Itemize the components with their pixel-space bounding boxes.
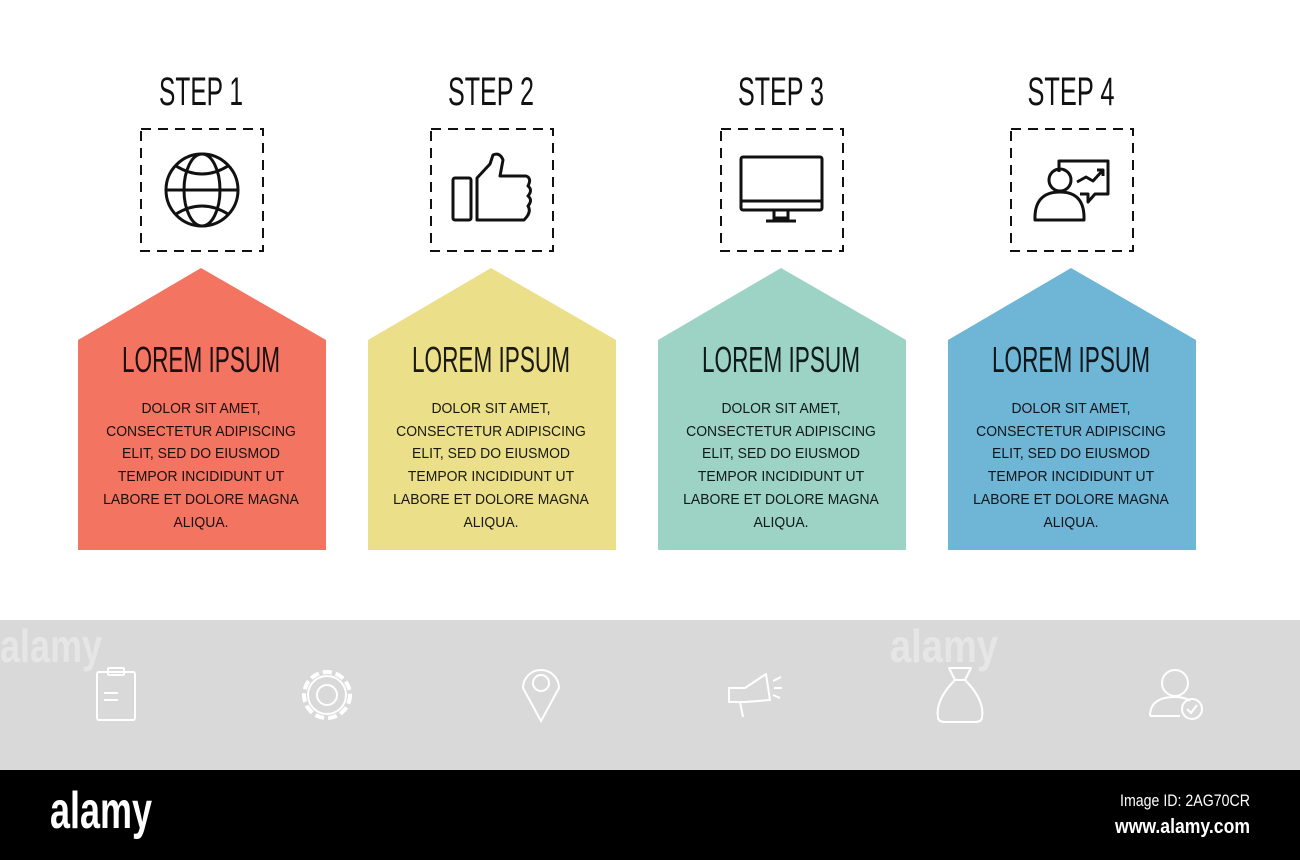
step 1 title: STEP 1 [159, 70, 243, 114]
panel: step 1 card: CONSECTETUR ADIPISCING [106, 424, 296, 440]
step 2 title: STEP 2 [448, 70, 534, 114]
panel: step 2 card [368, 268, 616, 550]
icon: clipboard [97, 668, 135, 720]
panel: step 3 card: LOREM IPSUM [702, 339, 860, 380]
panel: step 2 card: ALIQUA. [464, 515, 518, 531]
panel: step 1 card [78, 268, 326, 550]
step 3 title: STEP 3 [738, 70, 824, 114]
panel: step 4 card: ALIQUA. [1044, 515, 1098, 531]
panel: step 3 card: CONSECTETUR ADIPISCING [686, 424, 876, 440]
footer logo: alamy [50, 782, 152, 840]
panel: step 1 card: TEMPOR INCIDIDUNT UT [118, 469, 284, 485]
panel: step 2 card: LOREM IPSUM [412, 339, 570, 380]
panel: step 4 card: LOREM IPSUM [992, 339, 1150, 380]
panel: step 4 card [948, 268, 1196, 550]
panel: step 3 card: ELIT, SED DO EIUSMOD [702, 446, 860, 462]
panel: step 1 card: LABORE ET DOLORE MAGNA [103, 492, 299, 508]
panel: step 4 card: DOLOR SIT AMET, [1011, 401, 1131, 417]
footer: black band [0, 770, 1300, 860]
icon: thumbs up in dashed box [431, 129, 553, 251]
footer image id: Image ID: 2AG70CR [1120, 791, 1250, 810]
panel: step 4 card: TEMPOR INCIDIDUNT UT [988, 469, 1154, 485]
panel: step 4 card: LABORE ET DOLORE MAGNA [973, 492, 1169, 508]
panel: step 3 card [658, 268, 906, 550]
step 3 column [658, 70, 906, 550]
step 1 column [78, 70, 326, 550]
panel: step 4 card: ELIT, SED DO EIUSMOD [992, 446, 1150, 462]
step 4 column [948, 70, 1196, 550]
panel: step 2 card: TEMPOR INCIDIDUNT UT [408, 469, 574, 485]
watermark text: alamy [0, 620, 102, 672]
panel: step 2 card: ELIT, SED DO EIUSMOD [412, 446, 570, 462]
gray icon band [0, 620, 1300, 770]
icon: megaphone [729, 674, 782, 717]
icon: globe in dashed box [141, 129, 263, 251]
panel: step 2 card: DOLOR SIT AMET, [431, 401, 551, 417]
panel: step 3 card: ALIQUA. [754, 515, 808, 531]
panel: step 4 card: CONSECTETUR ADIPISCING [976, 424, 1166, 440]
panel: step 1 card: ELIT, SED DO EIUSMOD [122, 446, 280, 462]
panel: step 2 card: CONSECTETUR ADIPISCING [396, 424, 586, 440]
icon: money bag [938, 668, 982, 722]
icon: presenter with chart in dashed box [1011, 129, 1133, 251]
icon: location pin [523, 670, 559, 721]
watermark text right: alamy [890, 620, 998, 672]
panel: step 3 card: LABORE ET DOLORE MAGNA [683, 492, 879, 508]
panel: step 1 card: ALIQUA. [174, 515, 228, 531]
icon: user check [1150, 670, 1202, 719]
icon: gear [304, 672, 350, 718]
panel: step 3 card: DOLOR SIT AMET, [721, 401, 841, 417]
panel: step 2 card: LABORE ET DOLORE MAGNA [393, 492, 589, 508]
step 2 column [368, 70, 616, 550]
footer url: www.alamy.com [1114, 816, 1250, 838]
icon: monitor in dashed box [721, 129, 843, 251]
panel: step 3 card: TEMPOR INCIDIDUNT UT [698, 469, 864, 485]
panel: step 1 card: LOREM IPSUM [122, 339, 280, 380]
panel: step 1 card: DOLOR SIT AMET, [141, 401, 261, 417]
step 4 title: STEP 4 [1028, 70, 1114, 114]
